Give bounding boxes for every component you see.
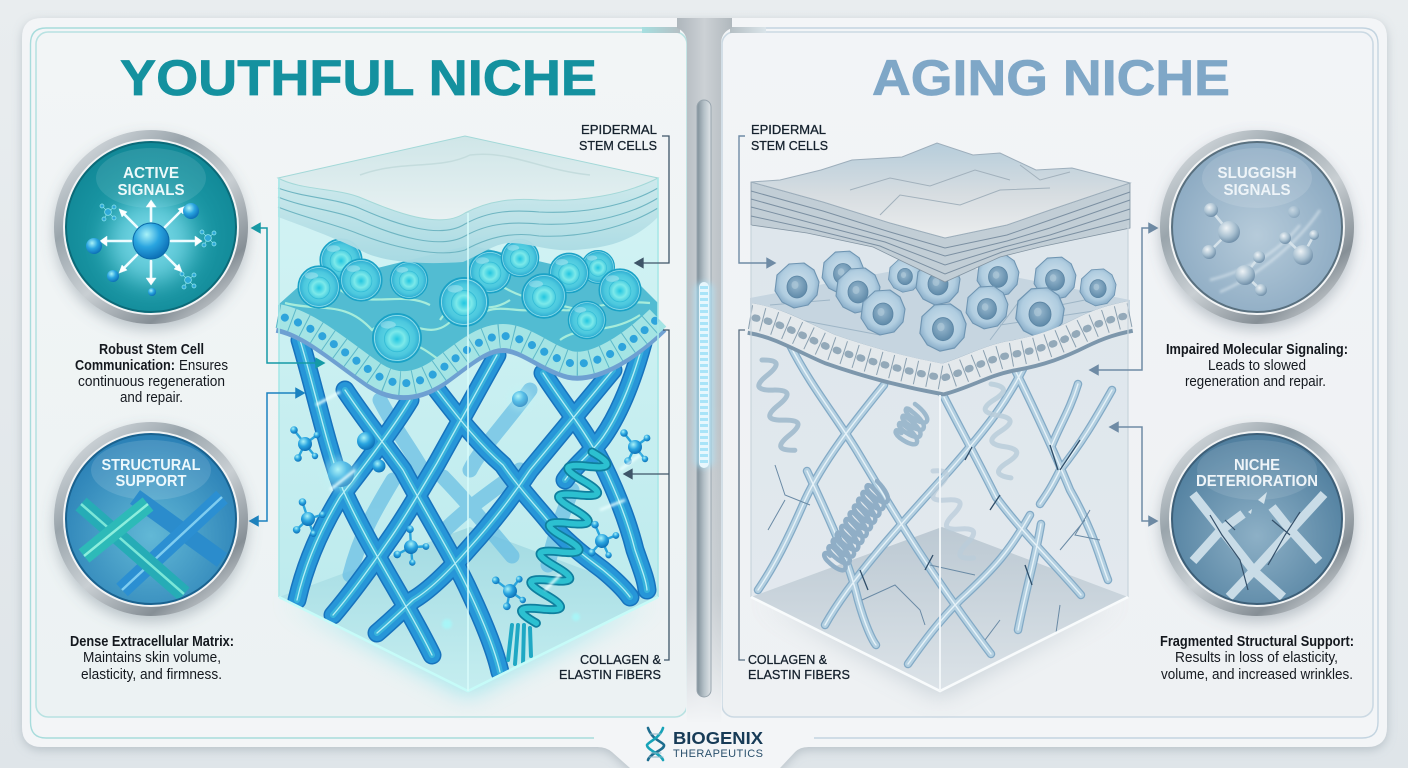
leader: collagen and elastin fibers — [624, 330, 669, 660]
label: epidermal stem cells: STEM CELLS — [579, 138, 657, 153]
label: collagen and elastin fibers — [559, 652, 661, 682]
badge: niche deterioration: NICHE — [1234, 457, 1280, 474]
panel: aging niche — [722, 27, 1378, 738]
label: collagen and elastin fibers: ELASTIN FIBERS — [559, 667, 661, 682]
description: impaired signaling: Leads to slowed — [1208, 358, 1306, 374]
stratum layers — [751, 143, 1130, 282]
label: collagen and elastin fibers — [748, 652, 850, 682]
stem cell layer — [278, 239, 658, 388]
title: youthful niche: YOUTHFUL NICHE — [120, 50, 597, 106]
cube edges — [279, 178, 658, 597]
center divider — [677, 18, 732, 724]
fragmented fibers — [751, 345, 1112, 664]
title: aging niche: AGING NICHE — [872, 50, 1230, 106]
label: epidermal stem cells: EPIDERMAL — [581, 122, 657, 137]
diagram: aging skin cross-section — [750, 143, 1130, 697]
icon: signal arrows — [100, 200, 202, 285]
basal cell row — [278, 316, 658, 388]
icon: dna helix — [647, 728, 664, 760]
badge: active signals — [54, 130, 248, 324]
stratum layers — [278, 136, 658, 263]
aged cell layer — [750, 251, 1130, 381]
arrow: structural support — [250, 388, 304, 526]
description: dense matrix: Maintains skin volume, — [83, 650, 221, 666]
description: impaired signaling: regeneration and repair. — [1185, 374, 1326, 390]
badge: structural support: SUPPORT — [116, 473, 187, 490]
elastin spring — [508, 446, 609, 664]
label: collagen and elastin fibers: COLLAGEN & — [748, 652, 827, 667]
leader: epidermal stem cells — [635, 136, 669, 268]
badge: sluggish signals: SIGNALS — [1224, 182, 1291, 199]
description: dense matrix — [70, 634, 234, 683]
logo: biogenix therapeutics: THERAPEUTICS — [673, 748, 763, 760]
panel: youthful niche — [30, 27, 687, 738]
label: collagen and elastin fibers: COLLAGEN & — [580, 652, 661, 667]
description: impaired signaling: Impaired Molecular Signaling: — [1166, 342, 1348, 358]
badge: niche deterioration: DETERIORATION — [1196, 473, 1318, 490]
description: fragmented support — [1160, 634, 1354, 683]
description: dense matrix: elasticity, and firmness. — [81, 667, 222, 683]
description: robust communication: and repair. — [120, 390, 183, 406]
description: dense matrix: Dense Extracellular Matrix: — [70, 634, 234, 650]
badge: structural support: STRUCTURAL — [102, 457, 201, 474]
badge: active signals: SIGNALS — [118, 182, 185, 199]
elastin coils — [751, 356, 1022, 572]
label: epidermal stem cells — [751, 122, 828, 153]
slot — [697, 100, 711, 697]
badge: sluggish signals — [1160, 130, 1354, 324]
cracks — [768, 440, 1100, 640]
icon: woven fibers — [81, 497, 222, 594]
badge: active signals: ACTIVE — [123, 165, 179, 182]
glowing indicator — [694, 282, 714, 468]
description: robust communication: Communication: — [75, 358, 175, 374]
label: epidermal stem cells: STEM CELLS — [751, 138, 828, 153]
collagen fibers — [288, 340, 650, 672]
description: robust communication — [75, 342, 228, 406]
label: collagen and elastin fibers: ELASTIN FIBERS — [748, 667, 850, 682]
logo: biogenix therapeutics: BIOGENIX — [673, 728, 763, 748]
diagram: youthful skin cross-section — [278, 136, 658, 697]
description: fragmented support: Results in loss of elasticity, — [1175, 650, 1338, 666]
arrow: niche deterioration — [1110, 422, 1157, 526]
icon: cracked fibers — [1193, 492, 1324, 597]
label: epidermal stem cells: EPIDERMAL — [751, 122, 826, 137]
description: robust communication: continuous regeneration — [78, 374, 225, 390]
description: robust communication: Robust Stem Cell — [99, 342, 204, 358]
icon: slow molecules — [1202, 203, 1320, 296]
description: robust communication: Ensures — [179, 358, 228, 374]
basal cell row — [750, 315, 1130, 380]
badge: structural support — [54, 422, 248, 616]
label: epidermal stem cells — [579, 122, 657, 153]
logo: biogenix therapeutics — [647, 728, 763, 760]
arrow: active signals — [252, 224, 324, 368]
molecules — [288, 387, 650, 629]
description: fragmented support: Fragmented Structural Support: — [1160, 634, 1354, 650]
description: fragmented support: volume, and increased wrinkles. — [1161, 667, 1353, 683]
description: impaired signaling — [1166, 342, 1348, 390]
arrow: sluggish signals — [1090, 224, 1157, 374]
badge: niche deterioration — [1160, 422, 1354, 616]
leader: collagen and elastin fibers — [739, 330, 745, 660]
badge: sluggish signals: SLUGGISH — [1218, 165, 1296, 182]
cube edges — [751, 225, 1128, 597]
leader: epidermal stem cells — [739, 136, 775, 268]
